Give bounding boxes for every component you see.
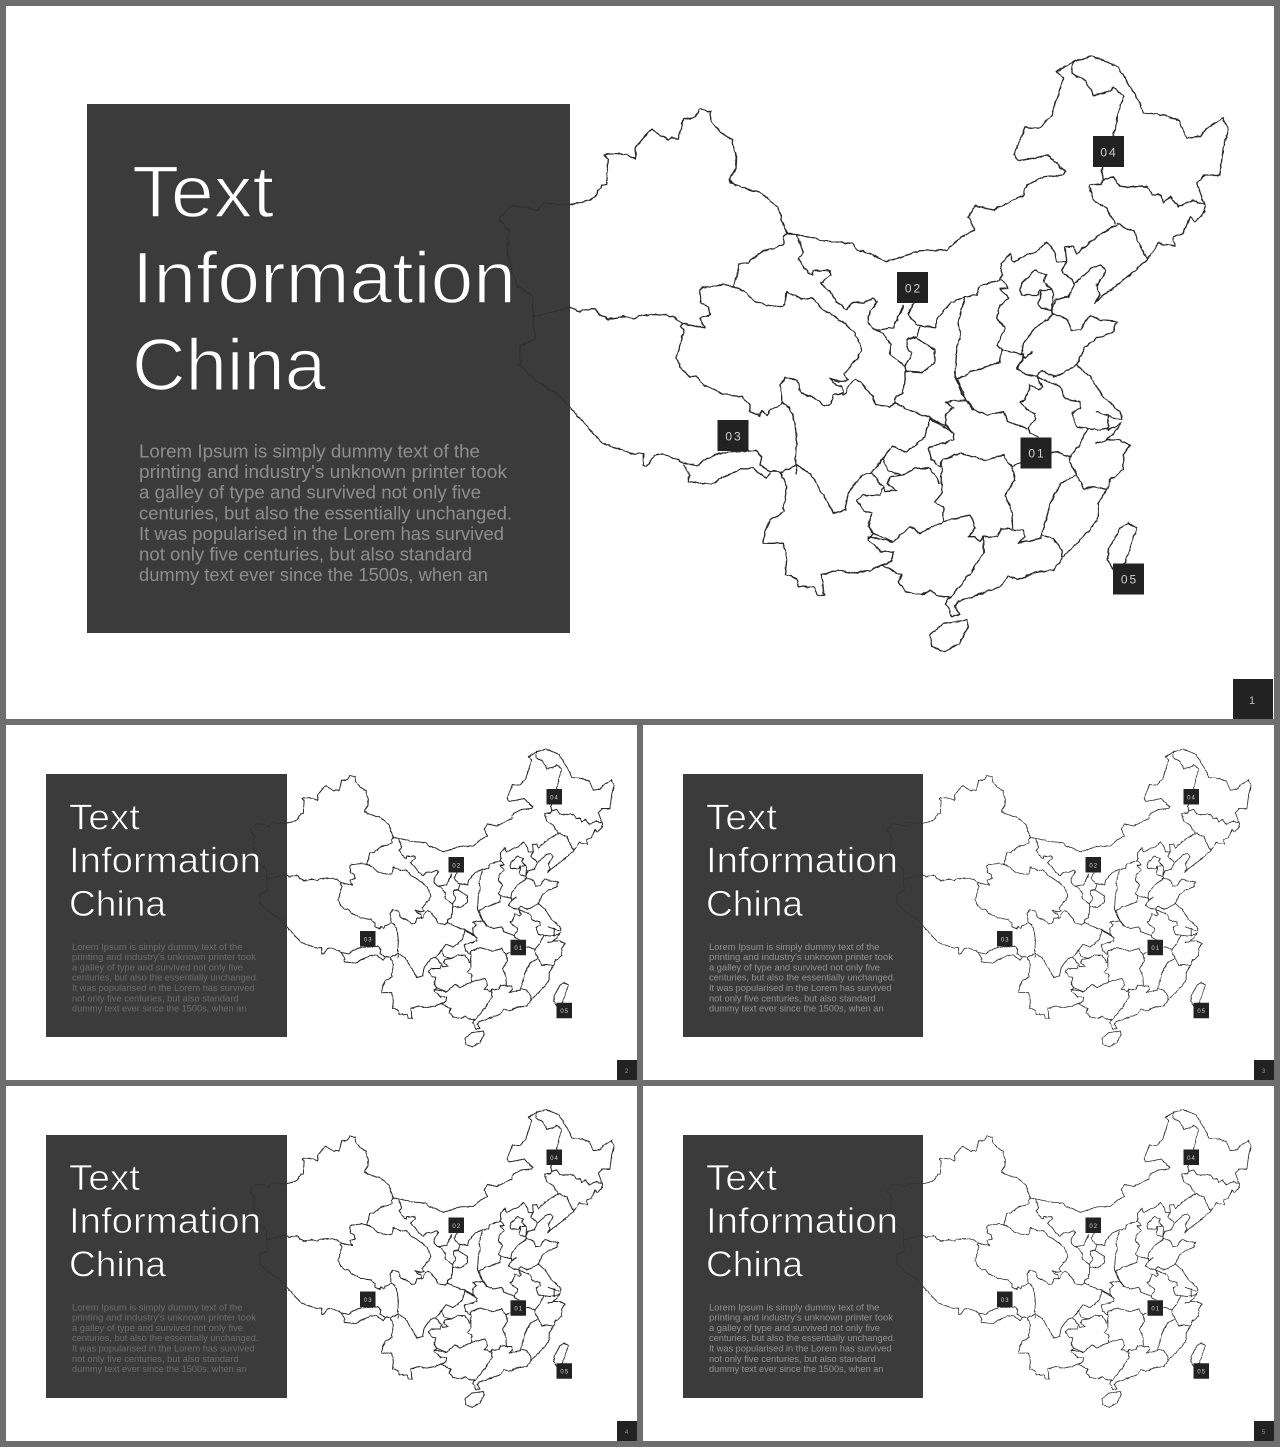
map marker 04: 04	[1100, 146, 1118, 160]
panel: dark text box	[46, 1135, 287, 1398]
title	[69, 796, 261, 924]
title: Information	[706, 840, 898, 880]
page number badge: 2	[625, 1069, 629, 1075]
map markers	[997, 1150, 1209, 1379]
map markers: 04	[550, 795, 559, 801]
body text: a galley of type and survived not only five	[709, 1323, 880, 1333]
body text: dummy text ever since the 1500s, when an	[709, 1004, 884, 1014]
map marker 01: 01	[1028, 446, 1046, 460]
map of China with province outlines	[499, 56, 1228, 652]
title	[706, 1157, 898, 1284]
body text: a galley of type and survived not only five	[72, 1323, 243, 1333]
map markers: 03	[364, 937, 373, 943]
map markers	[360, 1150, 572, 1379]
map of China	[250, 749, 614, 1047]
map of China	[250, 1110, 614, 1407]
title: Information	[706, 1200, 898, 1241]
body text: not only five centuries, but also standard	[72, 1354, 239, 1364]
body text: centuries, but also the essentially unchanged.	[709, 1333, 896, 1343]
map markers: 01	[1151, 946, 1160, 952]
body text: It was popularised in the Lorem has survived	[709, 1343, 892, 1353]
body text: Lorem Ipsum is simply dummy text of the	[72, 942, 242, 952]
map markers: 05	[560, 1369, 569, 1375]
title	[132, 152, 516, 406]
title: Text	[706, 796, 777, 838]
body text: It was popularised in the Lorem has survived	[72, 1343, 254, 1353]
map markers: 02	[1089, 1224, 1098, 1230]
title: Text	[706, 1157, 777, 1198]
map markers: 02	[452, 863, 461, 869]
body text: a galley of type and survived not only five	[72, 962, 243, 972]
page number badge: 3	[1262, 1069, 1266, 1075]
body text: printing and industry's unknown printer took	[709, 952, 893, 962]
body text: printing and industry's unknown printer took	[709, 1313, 893, 1323]
body text	[72, 942, 258, 1014]
slide 2: top left thumbnail	[6, 725, 637, 1080]
map marker 04	[1093, 136, 1124, 167]
body text: centuries, but also the essentially unchanged.	[139, 502, 512, 523]
slide 4: bottom left thumbnail	[6, 1086, 637, 1441]
body text	[709, 942, 896, 1014]
map markers: 03	[364, 1298, 373, 1304]
body text: It was popularised in the Lorem has survived	[72, 983, 254, 993]
body text: dummy text ever since the 1500s, when an	[72, 1004, 246, 1014]
body text: Lorem Ipsum is simply dummy text of the	[139, 440, 480, 462]
map markers: 04	[1187, 795, 1196, 801]
page number badge: 5	[1262, 1430, 1266, 1436]
body text: It was popularised in the Lorem has survived	[709, 983, 892, 993]
body text: It was popularised in the Lorem has survived	[139, 523, 504, 544]
body text: not only five centuries, but also standard	[709, 1354, 876, 1364]
map marker 01	[1020, 438, 1052, 468]
page number badge	[617, 1421, 637, 1441]
body text: not only five centuries, but also standard	[139, 544, 472, 564]
body text: Lorem Ipsum is simply dummy text of the	[709, 942, 879, 952]
page number badge: 1	[1249, 695, 1255, 707]
map markers: 05	[1197, 1369, 1206, 1375]
body text	[709, 1302, 896, 1374]
map markers: 01	[514, 946, 523, 952]
title: Information	[69, 1200, 261, 1241]
map markers: 01	[1151, 1306, 1160, 1312]
page number badge	[1254, 1060, 1274, 1080]
map markers	[360, 789, 572, 1018]
body text: printing and industry's unknown printer took	[72, 1313, 256, 1323]
map marker 02	[897, 272, 928, 303]
panel: dark text box	[87, 104, 570, 633]
title: Information	[132, 238, 516, 319]
body text: centuries, but also the essentially unchanged.	[72, 973, 258, 983]
body text: printing and industry's unknown printer took	[139, 461, 508, 482]
map of China	[886, 1110, 1251, 1407]
body text: dummy text ever since the 1500s, when an	[139, 564, 488, 585]
body text	[139, 440, 512, 585]
map marker 05	[1113, 564, 1144, 594]
slide 1: large main slide	[6, 6, 1274, 719]
panel: dark text box	[683, 1135, 923, 1398]
title: China	[69, 883, 167, 924]
title: China	[706, 1244, 804, 1284]
map markers: 02	[1089, 863, 1098, 869]
map markers	[997, 789, 1209, 1018]
body text: a galley of type and survived not only five	[139, 482, 481, 503]
title	[69, 1157, 261, 1284]
body text: Lorem Ipsum is simply dummy text of the	[72, 1302, 242, 1312]
map markers: 02	[452, 1224, 461, 1230]
map marker 03	[718, 420, 748, 451]
map markers: 03	[1001, 937, 1010, 943]
body text: not only five centuries, but also standard	[72, 993, 239, 1003]
page number badge: 4	[625, 1430, 629, 1436]
map marker 03: 03	[725, 430, 743, 444]
body text: dummy text ever since the 1500s, when an	[72, 1364, 246, 1374]
map of China	[886, 749, 1251, 1047]
body text: printing and industry's unknown printer took	[72, 952, 256, 962]
title: Text	[132, 152, 274, 233]
title: China	[706, 883, 804, 924]
slide 3: top right thumbnail	[643, 725, 1274, 1080]
body text: a galley of type and survived not only five	[709, 962, 880, 972]
body text: dummy text ever since the 1500s, when an	[709, 1364, 884, 1374]
body text: centuries, but also the essentially unchanged.	[709, 973, 896, 983]
page number badge	[617, 1060, 637, 1080]
panel: dark text box	[683, 774, 923, 1037]
title: China	[132, 325, 326, 406]
body text	[72, 1302, 258, 1374]
panel: dark text box	[46, 774, 287, 1037]
map marker 05: 05	[1121, 572, 1138, 586]
body text: centuries, but also the essentially unchanged.	[72, 1333, 258, 1343]
title: Text	[69, 796, 140, 838]
map markers: 03	[1001, 1298, 1010, 1304]
map markers: 05	[1197, 1009, 1206, 1015]
page number badge	[1233, 679, 1273, 719]
title: Information	[69, 840, 261, 880]
body text: Lorem Ipsum is simply dummy text of the	[709, 1302, 879, 1312]
page number badge	[1254, 1421, 1274, 1441]
map markers: 04	[550, 1156, 559, 1162]
map markers: 05	[560, 1009, 569, 1015]
title: China	[69, 1244, 167, 1284]
body text: not only five centuries, but also standard	[709, 993, 876, 1003]
map markers: 04	[1187, 1156, 1196, 1162]
map marker 02: 02	[905, 282, 922, 296]
map markers: 01	[514, 1306, 523, 1312]
slide 5: bottom right thumbnail	[643, 1086, 1274, 1441]
title	[706, 796, 898, 924]
title: Text	[69, 1157, 140, 1198]
